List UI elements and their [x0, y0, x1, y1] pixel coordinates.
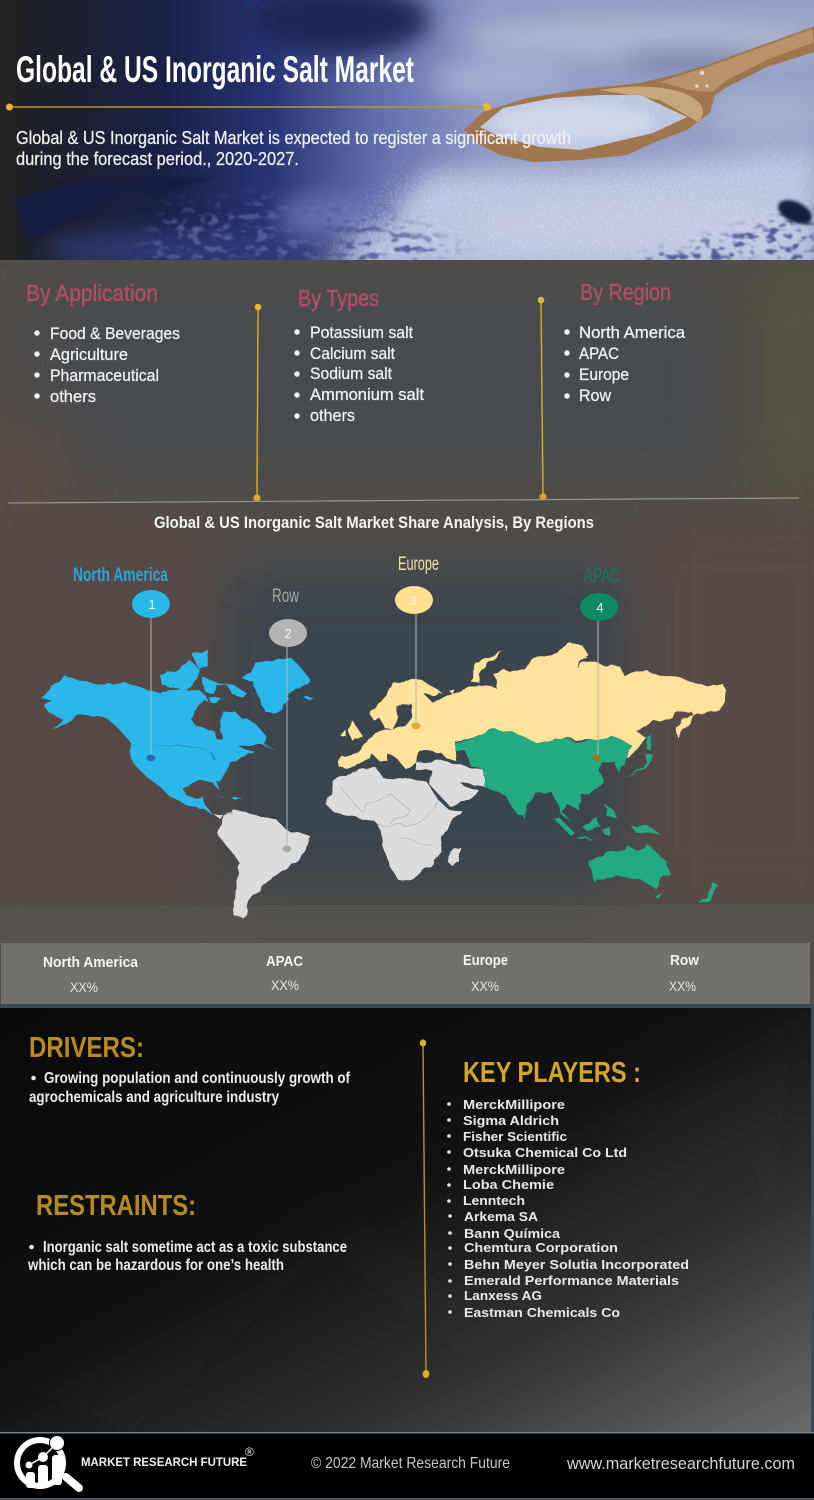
- text: drivers: Growing population and continuously growth of: [44, 1070, 351, 1087]
- callout: row: Row: [272, 586, 299, 607]
- panel background: segments and map: [0, 260, 814, 1005]
- share: europe: XX%: [471, 978, 499, 994]
- registered mark: ®: [245, 1445, 254, 1459]
- callout: north america: North America: [73, 565, 168, 586]
- callout: north america: 1: [148, 597, 156, 612]
- list: types: Calcium salt: [310, 344, 395, 363]
- share table: [0, 943, 814, 1008]
- text: drivers: agrochemicals and agriculture industry: [29, 1089, 279, 1106]
- panel: drivers, restraints and key players background: [0, 1008, 814, 1432]
- share: row: XX%: [669, 978, 696, 994]
- panel: drivers: [29, 1032, 351, 1106]
- list: applications: Agriculture: [50, 345, 128, 364]
- map: asia pacific: [455, 730, 720, 903]
- list: key players: Loba Chemie: [463, 1177, 554, 1192]
- share: north america: XX%: [70, 979, 98, 995]
- list: regions: North America: [579, 323, 686, 342]
- heading: key players: KEY PLAYERS :: [463, 1057, 641, 1089]
- share: apac: XX%: [271, 977, 299, 993]
- list: types: Potassium salt: [310, 323, 413, 342]
- heading: by region: By Region: [580, 279, 671, 305]
- share: europe: Europe: [463, 952, 508, 969]
- copyright: © 2022 Market Research Future: [311, 1455, 510, 1472]
- list: key players: Behn Meyer Solutia Incorporated: [464, 1257, 689, 1272]
- icon: market research future logo: [17, 1436, 79, 1488]
- divider: key players: [420, 1039, 429, 1378]
- callout: europe: [395, 554, 439, 729]
- brand name: MARKET RESEARCH FUTURE: [81, 1457, 247, 1469]
- list: key players: Otsuka Chemical Co Ltd: [463, 1145, 627, 1160]
- website: www.marketresearchfuture.com: [566, 1454, 795, 1473]
- list: types: others: [310, 406, 355, 425]
- map: africa and middle east: [325, 760, 486, 880]
- list: key players: MerckMillipore: [463, 1097, 565, 1112]
- text: restraints: [27, 1239, 347, 1274]
- share: apac: APAC: [266, 953, 303, 970]
- map heading: Global & US Inorganic Salt Market Share Analysis, By Regions: [154, 513, 594, 532]
- intro text: Global & US Inorganic Salt Market is expected to register a significant growth: [16, 128, 571, 148]
- heading: by application: By Application: [26, 280, 158, 306]
- dark salt patches: [134, 194, 814, 260]
- share: north america: [43, 954, 139, 995]
- intro text: [16, 128, 571, 169]
- list: key players: Sigma Aldrich: [463, 1113, 559, 1128]
- list: regions: Europe: [579, 365, 629, 384]
- callout: apac: [580, 566, 620, 761]
- list: applications: Pharmaceutical: [50, 366, 159, 385]
- list: key players: Lenntech: [463, 1193, 525, 1208]
- hero banner: [0, 0, 814, 270]
- list: applications: Food & Beverages: [50, 324, 180, 343]
- list: key players: Arkema SA: [464, 1209, 539, 1224]
- list: key players: Fisher Scientific: [463, 1129, 567, 1144]
- text: drivers: [29, 1070, 351, 1106]
- heading: by types: By Types: [298, 285, 379, 311]
- callout: europe: Europe: [398, 554, 439, 575]
- text: restraints: which can be hazardous for one’s health: [27, 1257, 284, 1274]
- icon: wooden spoon with salt: [464, 26, 814, 162]
- list: key players: Eastman Chemicals Co: [464, 1305, 620, 1320]
- map: south america: [213, 810, 311, 919]
- share: row: Row: [670, 952, 699, 969]
- divider: application and types: [253, 304, 261, 502]
- title rule: [6, 103, 491, 111]
- callout: apac: APAC: [584, 566, 620, 587]
- list: key players: Emerald Performance Materials: [464, 1273, 679, 1288]
- panel: by types: [294, 285, 424, 425]
- list: key players: [447, 1097, 689, 1320]
- share: north america: North America: [43, 954, 139, 971]
- divider: types and region: [538, 297, 547, 501]
- list: regions: Row: [579, 386, 612, 405]
- list: types: Sodium salt: [310, 364, 392, 383]
- map: north america: [42, 649, 315, 815]
- list: key players: Lanxess AG: [464, 1288, 542, 1303]
- callout: north america: [73, 565, 170, 761]
- share: row: [669, 952, 699, 994]
- callout: europe: 3: [409, 593, 417, 608]
- list: key players: Bann Química: [464, 1226, 561, 1241]
- panel: by region: [564, 279, 686, 405]
- share: apac: [266, 953, 303, 993]
- text: restraints: Inorganic salt sometime act as a toxic substance: [43, 1239, 347, 1256]
- intro text: during the forecast period., 2020-2027.: [16, 149, 299, 169]
- list: applications: others: [50, 387, 96, 406]
- footer: [0, 1432, 814, 1500]
- panel: key players: [447, 1057, 689, 1320]
- list: regions: APAC: [579, 344, 619, 363]
- share: europe: [463, 952, 508, 994]
- callout: apac: 4: [596, 600, 604, 615]
- world map: [42, 643, 724, 919]
- panel: restraints: [27, 1190, 347, 1274]
- list: types: [294, 323, 424, 425]
- map: europe and russia: [339, 643, 724, 768]
- title: Global & US Inorganic Salt Market: [16, 49, 414, 90]
- list: applications: [34, 324, 180, 406]
- callout: row: [269, 586, 307, 852]
- heading: restraints: RESTRAINTS:: [36, 1190, 196, 1222]
- callout: row: 2: [284, 626, 292, 641]
- panel: by application: [26, 280, 180, 406]
- heading: drivers: DRIVERS:: [29, 1032, 144, 1064]
- list: key players: MerckMillipore: [463, 1162, 565, 1177]
- list: regions: [564, 323, 686, 405]
- list: types: Ammonium salt: [310, 385, 424, 404]
- list: key players: Chemtura Corporation: [464, 1240, 618, 1255]
